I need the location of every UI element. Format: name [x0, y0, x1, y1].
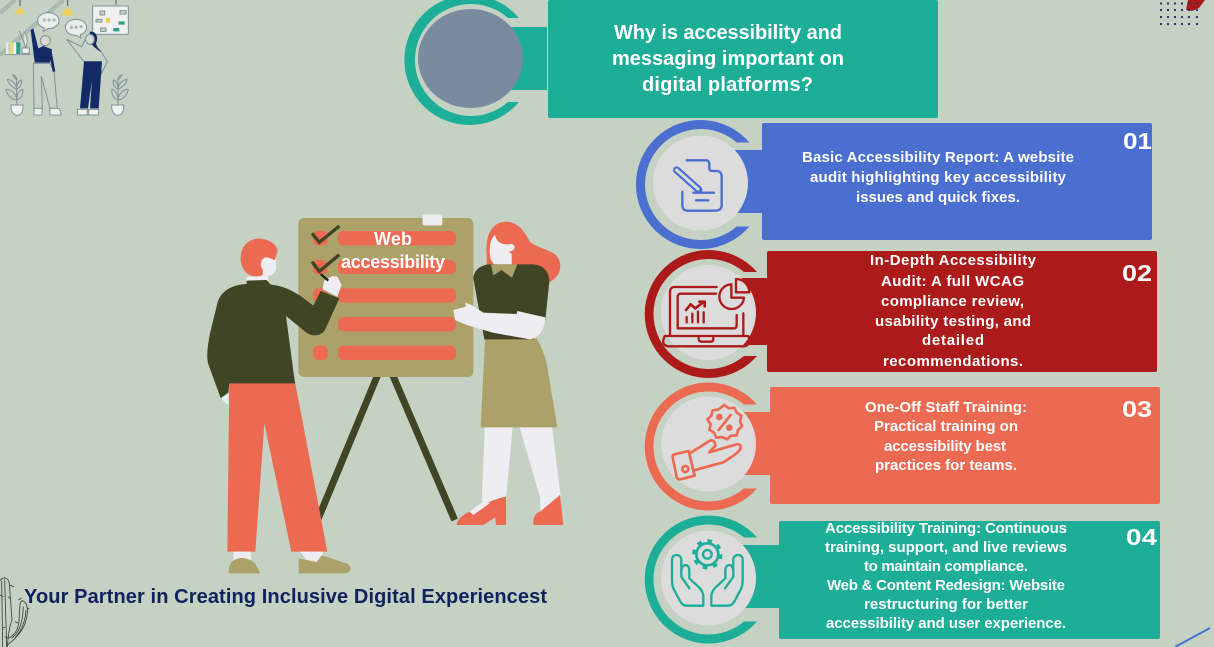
panel text: Practical training on	[874, 418, 1018, 435]
panel text: Web & Content Redesign: Website	[827, 577, 1065, 594]
header panel: question	[404, 0, 938, 125]
header ring	[404, 0, 519, 125]
checklist board	[298, 215, 473, 377]
panel text	[870, 252, 1037, 370]
man	[207, 239, 351, 573]
tagline: Your Partner in Creating Inclusive Digital Experiencest	[24, 586, 547, 608]
header text: Why is accessibility and	[614, 22, 842, 44]
illustration: two people at a checklist board	[207, 215, 563, 573]
panel 02: in-depth accessibility audit	[645, 250, 1157, 378]
number 04: 04	[1126, 524, 1157, 550]
panel 01: basic accessibility report	[636, 120, 1152, 249]
header text: messaging important on	[612, 48, 844, 70]
header text	[612, 22, 844, 96]
panel text: One-Off Staff Training:	[865, 399, 1027, 416]
icon: hand holding percent badge	[673, 405, 742, 479]
panel text: recommendations.	[883, 353, 1023, 370]
number 01: 01	[1123, 128, 1152, 154]
decoration: blue corner line	[1175, 628, 1210, 647]
icon: laptop with charts	[663, 279, 750, 346]
panel text: accessibility best	[884, 438, 1006, 455]
panel 03: one-off staff training	[645, 383, 1160, 510]
easel legs	[318, 375, 455, 520]
panel text: usability testing, and	[875, 313, 1031, 330]
panel text	[825, 520, 1067, 632]
header text: digital platforms?	[642, 74, 813, 96]
illustration: cactus	[0, 578, 29, 647]
panel text	[865, 399, 1027, 474]
panel text: accessibility and user experience.	[826, 615, 1066, 632]
icon: hands holding gear	[672, 541, 743, 606]
board label: Web accessibility	[341, 229, 445, 272]
panel text: practices for teams.	[875, 457, 1017, 474]
panel text: detailed	[922, 332, 984, 349]
panel text	[802, 149, 1074, 206]
number 03: 03	[1122, 396, 1152, 422]
panel text: Audit: A full WCAG	[881, 273, 1024, 290]
illustration: colleagues at a wall	[0, 0, 128, 115]
panel 04: accessibility training and redesign	[645, 516, 1160, 644]
panel text: Accessibility Training: Continuous	[825, 520, 1067, 537]
panel text: In-Depth Accessibility	[870, 252, 1037, 269]
panel text: issues and quick fixes.	[856, 189, 1020, 206]
decoration: dot grid and red corner shape	[1160, 0, 1205, 25]
number 02: 02	[1122, 260, 1152, 286]
panel text: to maintain compliance.	[864, 558, 1028, 575]
panel text: audit highlighting key accessibility	[810, 169, 1067, 186]
icon: document and pen	[677, 160, 722, 211]
woman	[453, 222, 563, 525]
panel text: compliance review,	[881, 293, 1024, 310]
panel text: Basic Accessibility Report: A website	[802, 149, 1074, 166]
board label: Web accessibility: accessibility	[341, 252, 445, 272]
panel text: training, support, and live reviews	[825, 539, 1067, 556]
board label: Web accessibility: Web	[374, 229, 412, 249]
panel text: restructuring for better	[864, 596, 1028, 613]
